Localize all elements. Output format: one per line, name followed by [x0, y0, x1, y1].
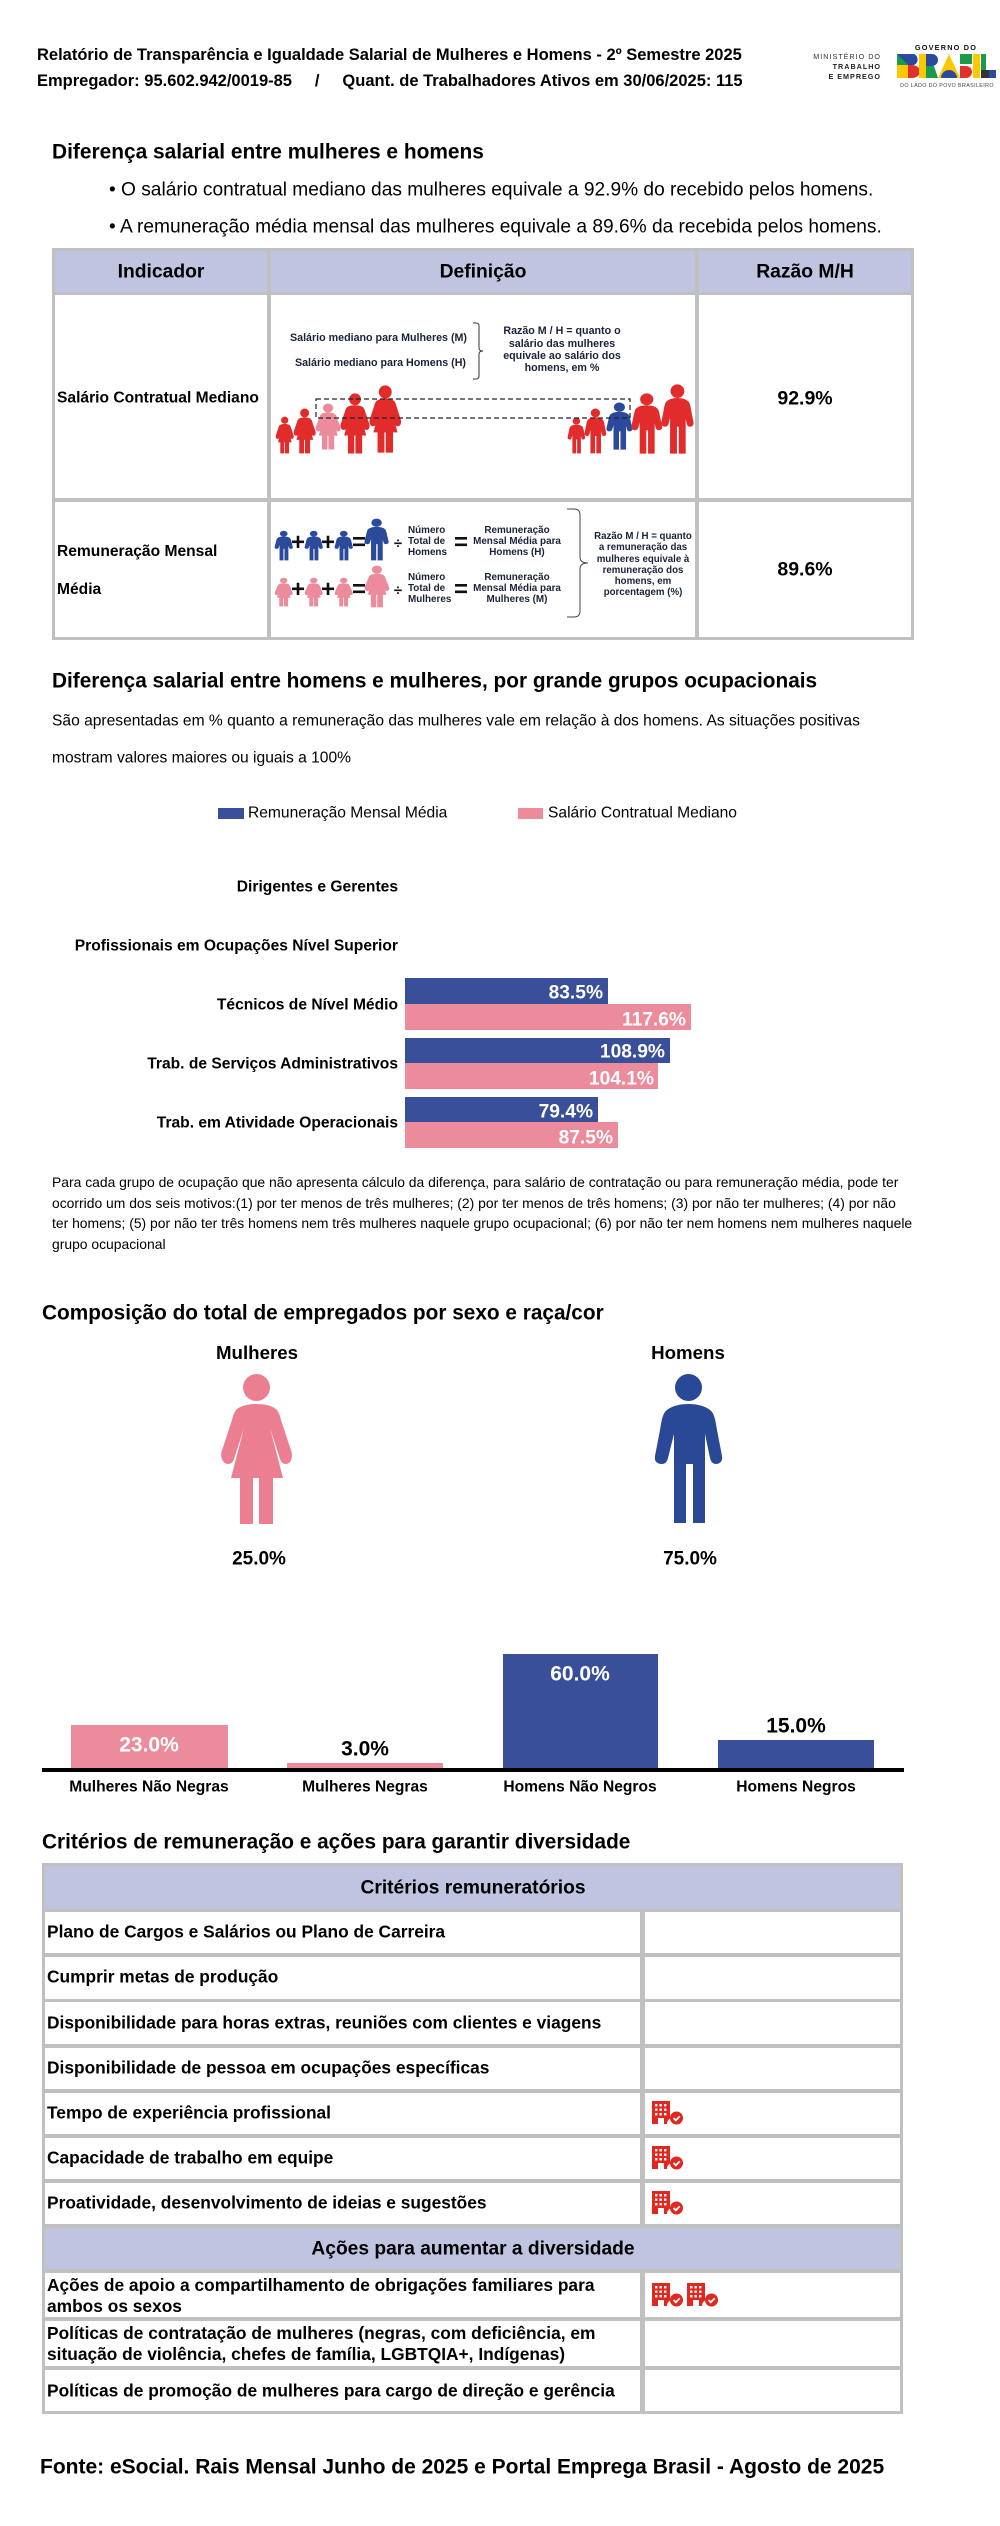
- table header: definição: Definição: [440, 261, 526, 282]
- bar: operacionais remuneração: [405, 1097, 598, 1122]
- category label: Trab. em Atividade Operacionais: [157, 1115, 398, 1132]
- row cells: equipe: [45, 2138, 900, 2179]
- heading: composição: Composição do total de empregados por sexo e raça/cor: [42, 1302, 604, 1325]
- criterion: Tempo de experiência profissional: [47, 2103, 331, 2123]
- source: Fonte: eSocial. Rais Mensal Junho de 2025 e Portal Emprega Brasil - Agosto de 2025: [40, 2455, 884, 2478]
- bar: técnicos remuneração: [405, 978, 608, 1004]
- icon: company check: [652, 2283, 683, 2306]
- row label: remuneração mensal média: Remuneração Mensal: [57, 543, 217, 560]
- value: 89.6%: 89.6%: [777, 558, 833, 580]
- women sum row: [275, 566, 389, 607]
- value: 117.6%: [622, 1009, 686, 1030]
- criterion: Disponibilidade de pessoa em ocupações específicas: [47, 2058, 489, 2078]
- table header: indicador: Indicador: [118, 261, 204, 282]
- panel: indicator table: [52, 248, 914, 640]
- ratio definition text: homens, em: [615, 576, 672, 587]
- category label: Dirigentes e Gerentes: [237, 879, 398, 896]
- operators: ÷: [394, 535, 402, 552]
- panel: criteria table: [42, 1863, 903, 2414]
- row label: salário contratual mediano: Salário Contratual Mediano: [57, 389, 259, 406]
- action: Ações de apoio a compartilhamento de obrigações familiares para: [47, 2275, 594, 2295]
- brace: [473, 323, 483, 379]
- row label: remuneração mensal média: Média: [57, 581, 101, 598]
- total labels: Total de: [408, 583, 446, 594]
- logo: ministério e governo do Brasil: MINISTÉRIO DO: [813, 52, 881, 61]
- ratio definition text: salário das mulheres: [509, 338, 615, 350]
- total labels: Homens: [408, 547, 447, 558]
- diagram: remuneração média: [274, 508, 692, 618]
- average labels: [473, 525, 561, 605]
- diagram: salário mediano: [276, 322, 694, 454]
- row cells: metas: [45, 1957, 900, 1999]
- operators: +: [321, 576, 335, 603]
- row 2 ratio cell: [699, 502, 911, 637]
- header cell: razão: [699, 251, 911, 292]
- value: 15.0%: [766, 1714, 826, 1737]
- category label: Trab. de Serviços Administrativos: [147, 1056, 398, 1073]
- operators: =: [454, 576, 468, 603]
- legend swatch: pink: [518, 808, 543, 819]
- action: Políticas de contratação de mulheres (negras, com deficiência, em: [47, 2323, 595, 2343]
- bullet: remuneração média: • A remuneração média mensal das mulheres equivale a 89.6% da recebida pelos homens.: [109, 217, 882, 238]
- legend: [218, 805, 737, 822]
- logo: ministério e governo do Brasil: [813, 43, 996, 89]
- median formula text: Salário mediano para Homens (H): [295, 357, 466, 369]
- ratio definition text: a remuneração das: [599, 542, 687, 553]
- operators: +: [291, 529, 305, 556]
- ratio definition text: remuneração dos: [603, 565, 683, 576]
- total labels: Número: [408, 525, 445, 536]
- average labels: Mensal Média para: [473, 536, 561, 547]
- logo: ministério e governo do Brasil: TRABALHO: [833, 62, 881, 71]
- value: 3.0%: [341, 1737, 389, 1760]
- header band: critérios: [45, 1866, 900, 1909]
- legend label: salário: Salário Contratual Mediano: [548, 805, 737, 822]
- total labels: [408, 525, 452, 605]
- report title: Relatório de Transparência e Igualdade Salarial de Mulheres e Homens - 2º Semestre 2025: [37, 46, 742, 64]
- header cell: indicador: [55, 251, 267, 292]
- icon: company check: [652, 2146, 683, 2170]
- total labels: Total de: [408, 536, 446, 547]
- bar: homens não negros: [503, 1654, 658, 1769]
- employer info: Empregador: 95.602.942/0019-85 / Quant. de Trabalhadores Ativos em 30/06/2025: 115: [37, 72, 743, 90]
- footnote: Para cada grupo de ocupação que não apresenta cálculo da diferença, para salário de contratação ou para remuneração média, pode ter: [52, 1174, 898, 1190]
- operators: =: [454, 529, 468, 556]
- men group: [568, 385, 693, 453]
- value: 83.5%: [549, 982, 603, 1003]
- bar: mulheres negras: [287, 1763, 443, 1769]
- average labels: Homens (H): [489, 547, 545, 558]
- value: 104.1%: [589, 1068, 654, 1089]
- total labels: Mulheres: [408, 594, 452, 605]
- value: 87.5%: [559, 1127, 613, 1148]
- ratio definition text: [594, 531, 692, 598]
- operators: +: [321, 529, 335, 556]
- bar: operacionais salário: [405, 1122, 618, 1148]
- axis label: Mulheres Não Negras: [69, 1779, 229, 1796]
- intro text line 1: São apresentadas em % quanto a remuneração das mulheres vale em relação à dos homens. As situações positivas: [52, 713, 860, 730]
- criterion: Capacidade de trabalho em equipe: [47, 2148, 333, 2168]
- bar: homens negros: [718, 1740, 874, 1769]
- ratio definition text: mulheres equivale à: [597, 554, 690, 565]
- logo: ministério e governo do Brasil: DO LADO DO POVO BRASILEIRO: [900, 83, 994, 89]
- row cells: promoção: [45, 2370, 900, 2411]
- men sum row: [275, 519, 388, 560]
- bullet: salário contratual: • O salário contratual mediano das mulheres equivale a 92.9% do recebido pelos homens.: [109, 180, 873, 201]
- footnote: ocorrido um dos seis motivos:(1) por ter menos de três mulheres; (2) por ter menos de três homens; (3) por não ter mulheres; (4) por não: [52, 1195, 896, 1211]
- average labels: Remuneração: [484, 525, 550, 536]
- value: 79.4%: [539, 1101, 593, 1122]
- value: 92.9%: 92.9%: [777, 387, 833, 409]
- median formula text: [290, 332, 467, 369]
- row cells: ocupações específicas: [45, 2048, 900, 2089]
- footnote: grupo ocupacional: [52, 1236, 166, 1252]
- brace: [567, 509, 588, 617]
- heading: critérios: Critérios de remuneração e ações para garantir diversidade: [42, 1831, 630, 1854]
- heading: diferença salarial: Diferença salarial entre mulheres e homens: [52, 140, 484, 163]
- operators: +: [291, 576, 305, 603]
- category label: Técnicos de Nível Médio: [217, 997, 398, 1014]
- row cells: apoio: [45, 2273, 900, 2317]
- value: 60.0%: [550, 1662, 610, 1685]
- operators: =: [352, 576, 366, 603]
- criterion: Plano de Cargos e Salários ou Plano de Carreira: [47, 1922, 445, 1942]
- criterion: Proatividade, desenvolvimento de ideias e sugestões: [47, 2193, 487, 2213]
- legend label: remuneração: Remuneração Mensal Média: [248, 805, 447, 822]
- median formula text: Salário mediano para Mulheres (M): [290, 332, 467, 344]
- action: [47, 2275, 595, 2316]
- row 2 indicator cell: [55, 502, 267, 637]
- row 1 ratio cell: [699, 295, 911, 498]
- intro text line 2: mostram valores maiores ou iguais a 100%: [52, 750, 351, 767]
- legend swatch: blue: [218, 808, 244, 819]
- row 1 indicator cell: [55, 295, 267, 498]
- axis label: Mulheres Negras: [302, 1779, 428, 1796]
- average labels: Mensal Média para: [473, 583, 561, 594]
- header cell: definição: [271, 251, 695, 292]
- row cells: horas extras: [45, 2002, 900, 2044]
- operators: ÷: [394, 582, 402, 599]
- label: mulheres: Mulheres: [216, 1342, 298, 1363]
- criterion: Disponibilidade para horas extras, reuniões com clientes e viagens: [47, 2013, 601, 2033]
- logo: ministério e governo do Brasil: E EMPREGO: [828, 72, 881, 81]
- row cells: plano de cargos: [45, 1912, 900, 1953]
- criterion: Cumprir metas de produção: [47, 1967, 278, 1987]
- logo: ministério e governo do Brasil: GOVERNO DO: [915, 43, 977, 52]
- axis label: Homens Não Negros: [503, 1779, 657, 1796]
- bar chart: composition: [42, 1654, 904, 1796]
- table header: ações: Ações para aumentar a diversidade: [311, 2238, 635, 2259]
- axis label: Homens Negros: [736, 1779, 856, 1796]
- row cells: contratação: [45, 2321, 900, 2366]
- total labels: Número: [408, 572, 445, 583]
- footnote: ter homens; (5) por não ter três homens nem três mulheres naquele grupo ocupacional; (6) por não ter nem homens nem mulheres naquele: [52, 1215, 912, 1231]
- ratio definition text: [503, 325, 621, 374]
- value: 108.9%: [600, 1041, 665, 1062]
- category label: Profissionais em Ocupações Nível Superior: [75, 938, 398, 955]
- median dashed box: [316, 399, 630, 418]
- bar: técnicos salário: [405, 1004, 691, 1030]
- header band: ações: [45, 2228, 900, 2269]
- bar chart: occupational groups: [75, 879, 691, 1148]
- ratio definition text: Razão M / H = quanto o: [503, 325, 621, 337]
- row 2 definition cell: [271, 502, 695, 637]
- value: 25.0%: 25.0%: [232, 1549, 286, 1570]
- ratio definition text: homens, em %: [525, 362, 600, 374]
- icon: company check: [652, 2191, 683, 2214]
- table header: critérios remuneratórios: Critérios remuneratórios: [360, 1877, 586, 1898]
- axis: [42, 1768, 904, 1772]
- action: situação de violência, chefes de família, LGBTQIA+, Indígenas): [47, 2344, 565, 2364]
- operators: =: [352, 529, 366, 556]
- table header: razão M/H: Razão M/H: [756, 261, 854, 282]
- label: homens: Homens: [651, 1342, 725, 1363]
- icon: company check: [652, 2101, 683, 2124]
- ratio definition text: Razão M / H = quanto: [594, 531, 692, 542]
- icon: woman: [221, 1374, 292, 1524]
- bar: administrativos salário: [405, 1063, 658, 1089]
- heading: por grupos ocupacionais: Diferença salarial entre homens e mulheres, por grande grupos ocupacionais: [52, 670, 817, 693]
- value: 23.0%: [119, 1733, 179, 1756]
- footnote: [52, 1174, 912, 1252]
- row label: remuneração mensal média: [57, 543, 217, 598]
- action: ambos os sexos: [47, 2296, 182, 2316]
- action: Políticas de promoção de mulheres para cargo de direção e gerência: [47, 2381, 615, 2401]
- bar: administrativos remuneração: [405, 1038, 670, 1063]
- operators: [291, 529, 468, 603]
- value: 75.0%: 75.0%: [663, 1549, 717, 1570]
- row cells: experiência: [45, 2093, 900, 2134]
- ratio definition text: porcentagem (%): [604, 587, 682, 598]
- average labels: Mulheres (M): [487, 594, 547, 605]
- row 1 definition cell: [271, 295, 695, 498]
- average labels: Remuneração: [484, 572, 550, 583]
- icon: man: [654, 1374, 722, 1523]
- ratio definition text: equivale ao salário dos: [503, 350, 621, 362]
- action: [47, 2323, 595, 2364]
- icon: company check: [687, 2283, 718, 2306]
- bar: mulheres não negras: [71, 1725, 228, 1769]
- women group: [276, 386, 400, 453]
- row cells: proatividade: [45, 2183, 900, 2224]
